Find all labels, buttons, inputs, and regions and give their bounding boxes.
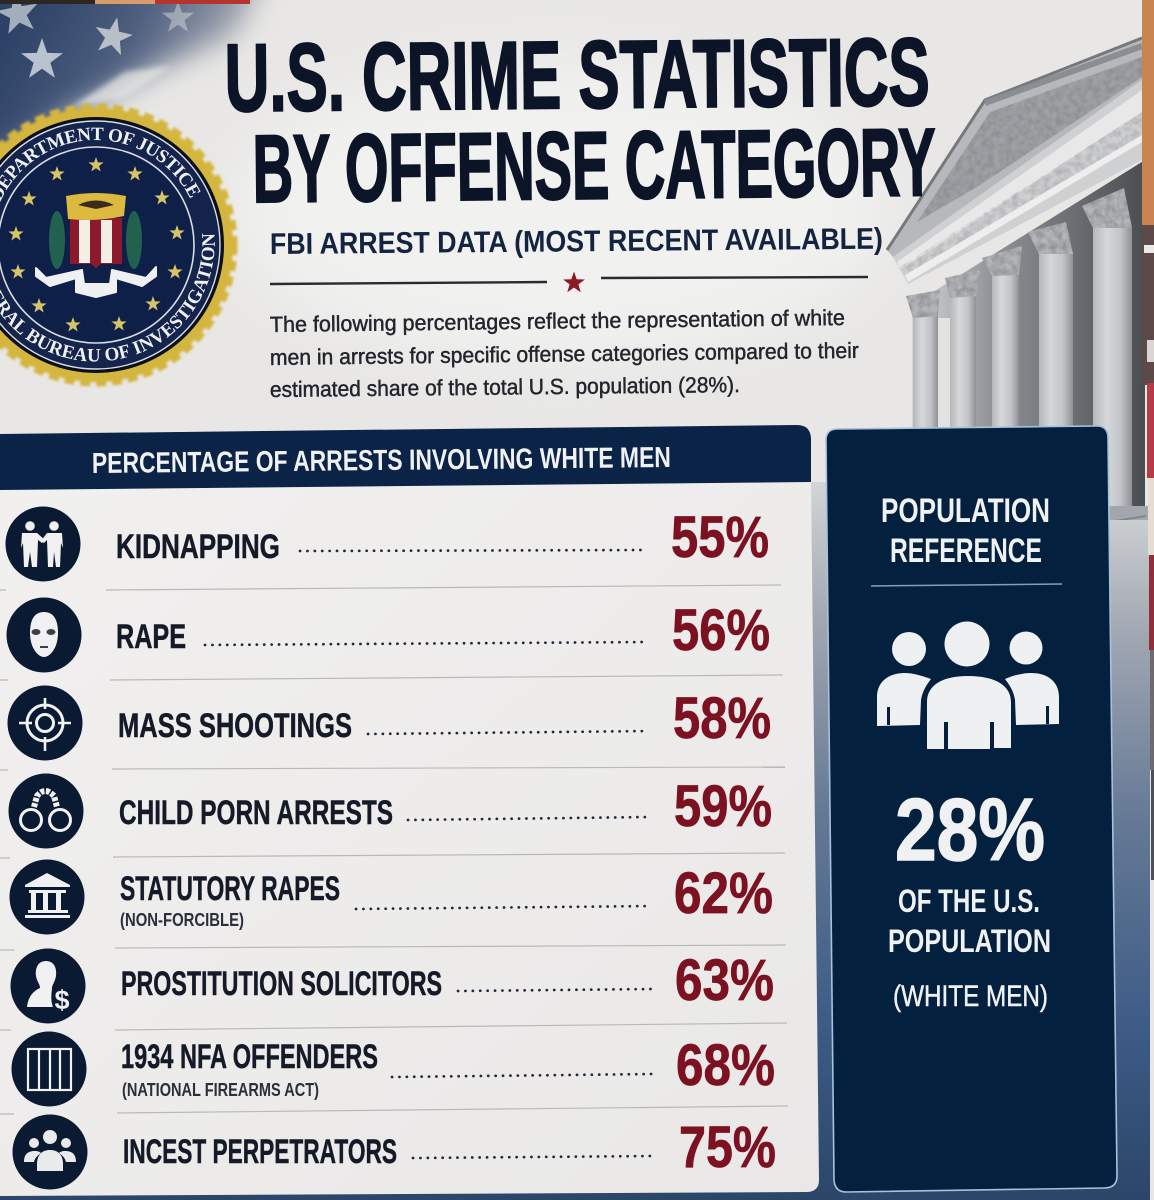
row: rape: RAPE xyxy=(116,618,186,656)
photo strip at right edge xyxy=(1142,0,1154,880)
row: prostitution solicitors xyxy=(10,948,774,1024)
building: capitals xyxy=(906,188,1132,318)
seal: shield xyxy=(66,193,126,268)
row: statutory rapes: STATUTORY RAPES xyxy=(120,870,340,908)
intro paragraph xyxy=(270,305,859,402)
building: steps xyxy=(1108,506,1148,566)
building: pediment xyxy=(887,38,1142,257)
row: mass shootings: 58% xyxy=(673,686,771,751)
panel: population reference xyxy=(826,426,1117,1192)
row: incest perpetrators: 75% xyxy=(679,1115,776,1180)
population caption: (WHITE MEN) xyxy=(893,980,1048,1013)
icon: person with dollar: $ xyxy=(54,985,70,1015)
row: child porn arrests xyxy=(8,774,772,848)
panel header bar xyxy=(0,425,811,490)
row: kidnapping: KIDNAPPING xyxy=(116,528,280,566)
row: rape xyxy=(6,598,770,672)
seal: stars xyxy=(8,157,185,331)
intro paragraph: estimated share of the total U.S. population (28%). xyxy=(270,372,740,402)
row: mass shootings xyxy=(8,686,771,760)
row: statutory rapes: (NON-FORCIBLE) xyxy=(120,910,244,930)
subtitle: FBI ARREST DATA (MOST RECENT AVAILABLE) xyxy=(270,223,883,261)
28 percent figure: 28% xyxy=(895,780,1045,879)
row: child porn arrests: CHILD PORN ARRESTS xyxy=(119,794,393,832)
panel heading xyxy=(881,492,1050,570)
row: 1934 NFA offenders: (NATIONAL FIREARMS ACT) xyxy=(122,1080,319,1100)
row: prostitution solicitors: PROSTITUTION SOLICITORS xyxy=(121,965,442,1003)
icon: target xyxy=(8,686,82,760)
row: 1934 NFA offenders xyxy=(12,1032,775,1106)
slate background behind panels xyxy=(0,482,1150,1200)
icon: two people xyxy=(6,506,80,582)
row: 1934 NFA offenders: 68% xyxy=(676,1033,775,1098)
photo edge at top xyxy=(0,0,250,4)
panel body xyxy=(0,480,819,1196)
panel: arrest percentages xyxy=(0,425,819,1196)
icon: jail bars xyxy=(12,1032,86,1106)
row: rape: 56% xyxy=(672,598,770,663)
icon: three people xyxy=(877,622,1059,749)
seal: laurels xyxy=(49,211,65,269)
row: statutory rapes xyxy=(10,860,773,934)
icon: mask xyxy=(6,598,82,672)
building: entablature xyxy=(893,80,1142,284)
building: shadow behind columns xyxy=(912,160,1145,510)
row: 1934 NFA offenders: 1934 NFA OFFENDERS xyxy=(121,1038,378,1076)
row: child porn arrests: 59% xyxy=(674,774,772,839)
panel heading: PERCENTAGE OF ARRESTS INVOLVING WHITE MEN xyxy=(92,442,671,480)
row: incest perpetrators xyxy=(12,1114,776,1190)
row: kidnapping: 55% xyxy=(671,505,769,570)
building illustration xyxy=(887,38,1148,566)
panel heading: POPULATION xyxy=(881,492,1050,530)
title xyxy=(224,19,936,223)
icon: family group xyxy=(12,1114,88,1190)
icon: handcuffs xyxy=(8,774,84,848)
row: statutory rapes: 62% xyxy=(674,861,773,926)
intro paragraph: men in arrests for specific offense categories compared to their xyxy=(270,338,859,370)
panel heading: REFERENCE xyxy=(890,532,1042,570)
population caption xyxy=(888,883,1051,1013)
seal: banner xyxy=(36,267,156,297)
intro paragraph: The following percentages reflect the representation of white xyxy=(270,305,845,337)
row: incest perpetrators: INCEST PERPETRATORS xyxy=(123,1133,397,1171)
icon: person with dollar xyxy=(10,948,86,1024)
row: kidnapping xyxy=(6,505,769,582)
FBI seal xyxy=(0,102,240,388)
icon: courthouse xyxy=(10,860,84,934)
building: columns xyxy=(913,226,1132,508)
flag background xyxy=(0,0,270,190)
row: prostitution solicitors: 63% xyxy=(675,948,774,1013)
row: mass shootings: MASS SHOOTINGS xyxy=(118,707,352,745)
population caption: OF THE U.S. xyxy=(898,883,1040,919)
star divider xyxy=(270,272,868,292)
population caption: POPULATION xyxy=(888,923,1051,959)
seal: rings xyxy=(0,117,224,373)
seal: gold fringe xyxy=(0,106,235,384)
